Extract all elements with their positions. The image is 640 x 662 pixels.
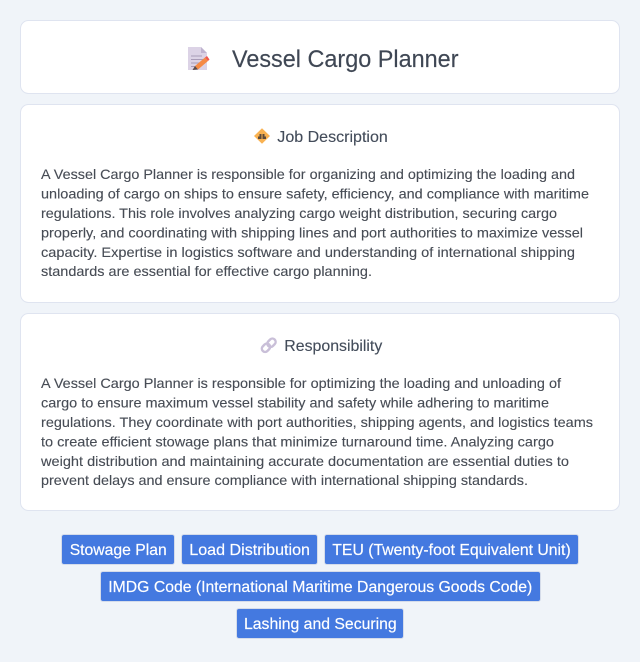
text block: job description (41, 166, 589, 279)
text block: job description: regulations. This role involves analyzing cargo weight distribution, securing cargo (41, 205, 557, 221)
tag: Stowage Plan: Stowage Plan (70, 542, 167, 559)
text block: job description: standards are essential for effective cargo planning. (41, 263, 372, 279)
text block: responsibility: cargo to ensure maximum vessel stability and safety while adhering to maritime (41, 394, 549, 410)
icon: document with pencil (188, 47, 210, 70)
heading: responsibility: Responsibility (284, 338, 382, 355)
text block: responsibility: to create efficient stowage plans that minimize turnaround time. Analyzing cargo (41, 434, 554, 450)
tag: IMDG Code: IMDG Code (International Maritime Dangerous Goods Code) (108, 579, 532, 596)
heading: job description: Job Description (277, 129, 388, 146)
text block: responsibility: weight distribution and maintaining accurate documentation are essential duties to (40, 453, 569, 469)
text block: job description: properly, and coordinating with shipping lines and port authorities to maximize vessel (41, 224, 583, 240)
tag: Lashing and Securing: Lashing and Securing (244, 616, 397, 633)
title: Vessel Cargo Planner (232, 46, 459, 73)
tag: Lashing and Securing (236, 608, 404, 638)
tag: Load Distribution (182, 534, 318, 564)
panel: title header (20, 20, 620, 94)
text block: responsibility: regulations. They coordinate with port authorities, shipping agents, and logistics teams (41, 414, 593, 430)
tag: TEU (324, 534, 578, 564)
panel: responsibility (20, 314, 620, 510)
icon: chain link (261, 337, 277, 353)
text block: responsibility: prevent delays and ensure compliance with international shipping standards. (41, 472, 528, 488)
tag: TEU: TEU (Twenty-foot Equivalent Unit) (332, 542, 571, 559)
tag: Stowage Plan (62, 534, 174, 564)
tag: Load Distribution: Load Distribution (189, 542, 310, 559)
panel: job description (20, 104, 620, 302)
text block: job description: unloading of cargo on ships to ensure safety, efficiency, and compliance with maritime (41, 186, 589, 202)
text block: responsibility (40, 375, 593, 488)
tag: IMDG Code (100, 572, 540, 602)
icon: orange diamond with people (254, 128, 270, 144)
text block: responsibility: A Vessel Cargo Planner is responsible for optimizing the loading and unloading of (41, 375, 561, 391)
text block: job description: capacity. Expertise in logistics software and understanding of international shipping (41, 244, 575, 260)
text block: job description: A Vessel Cargo Planner is responsible for organizing and optimizing the loading and (41, 166, 575, 182)
